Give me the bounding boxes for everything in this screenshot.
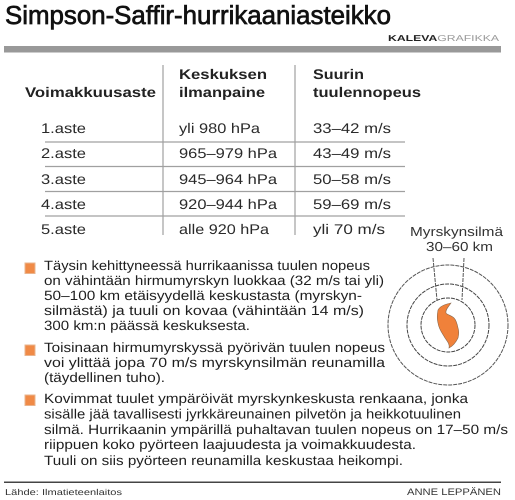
row 1: yli 980 hPa (179, 120, 260, 136)
column header: Keskuksen ilmanpaine: Keskuksen (179, 66, 267, 82)
text block 3: sisälle jää tavallisesti jyrkkäreunainen pilvetön ja heikkotuulinen (44, 406, 461, 422)
column header: Suurin tuulennopeus (313, 66, 421, 100)
label: storm eye: 30–60 km (426, 239, 493, 254)
text block 2: voi ylittää jopa 70 m/s myrskynsilmän reunamilla (44, 355, 386, 370)
row 5 (41, 221, 385, 237)
text block 3: Kovimmat tuulet ympäröivät myrskynkeskusta renkaana, jonka (44, 391, 469, 406)
row 1: 33–42 m/s (313, 120, 391, 136)
icon: hurricane swirl (437, 303, 459, 348)
credit: Kaleva Grafiikka: KALEVA GRAFIKKA (388, 33, 499, 43)
text block 2: Toisinaan hirmumyrskyssä pyörivän tuulen nopeus (44, 340, 385, 355)
bullet 1 (25, 258, 384, 333)
title: Simpson-Saffir-hurrikaaniasteikko (5, 0, 391, 30)
text block 1: 50–100 km etäisyydellä keskustasta (myrskyn- (44, 288, 362, 303)
row 5: yli 70 m/s (313, 221, 385, 237)
row 1 (41, 120, 391, 136)
text block 1: Täysin kehittyneessä hurrikaanissa tuulen nopeus (44, 258, 370, 273)
header bar (4, 46, 501, 52)
table (25, 65, 421, 237)
text block 3 (44, 391, 508, 468)
row 3 (41, 171, 391, 187)
hurricane diagram (388, 258, 508, 385)
row 4: 59–69 m/s (313, 196, 391, 212)
row 3: 50–58 m/s (313, 171, 391, 187)
column header: Suurin tuulennopeus: Suurin (313, 66, 364, 82)
text block 3: Tuuli on siis pyörteen reunamilla keskustaa heikompi. (44, 453, 403, 468)
row 4 (41, 196, 391, 212)
bullet 2 (25, 340, 386, 385)
text block 2: (täydellinen tuho). (44, 370, 165, 385)
icon: orange square (25, 345, 35, 356)
text block 1 (44, 258, 384, 333)
column header: Keskuksen ilmanpaine (179, 66, 267, 100)
row 5: alle 920 hPa (179, 221, 269, 237)
column header: Keskuksen ilmanpaine: ilmanpaine (179, 84, 265, 100)
icon: orange square (25, 395, 35, 406)
row 3: 945–964 hPa (179, 171, 277, 187)
text block 3: riippuen koko pyörteen laajuudesta ja voimakkuudesta. (44, 437, 416, 452)
row 2: 43–49 m/s (313, 145, 391, 161)
column header: Voimakkuusaste: Voimakkuusaste (25, 84, 156, 100)
icon: orange square (25, 263, 35, 274)
row 3: 3.aste (41, 171, 86, 187)
row 2: 965–979 hPa (179, 145, 277, 161)
row 5: 5.aste (41, 221, 86, 237)
label: storm eye: Myrskynsilmä (410, 224, 504, 239)
text block 1: on vähintään hirmumyrskyn luokkaa (32 m/s tai yli) (44, 273, 384, 288)
text block 2 (44, 340, 386, 385)
row 1: 1.aste (41, 120, 86, 136)
row 4: 920–944 hPa (179, 196, 277, 212)
text block 1: silmästä) ja tuuli on kovaa (vähintään 14 m/s) (44, 303, 364, 318)
text block 3: silmä. Hurrikaanin ympärillä puhaltavan tuulen nopeus on 17–50 m/s (44, 422, 508, 437)
source: Lähde: Ilmatieteenlaitos (5, 487, 122, 497)
column header: Suurin tuulennopeus: tuulennopeus (313, 84, 421, 100)
label: storm eye (410, 224, 504, 254)
bullet 3 (25, 391, 508, 468)
row 2 (41, 145, 391, 161)
text block 1: 300 km:n päässä keskuksesta. (44, 318, 250, 333)
row 4: 4.aste (41, 196, 86, 212)
footer rule (4, 482, 501, 483)
author: ANNE LEPPÄNEN (407, 487, 501, 498)
row 2: 2.aste (41, 145, 86, 161)
